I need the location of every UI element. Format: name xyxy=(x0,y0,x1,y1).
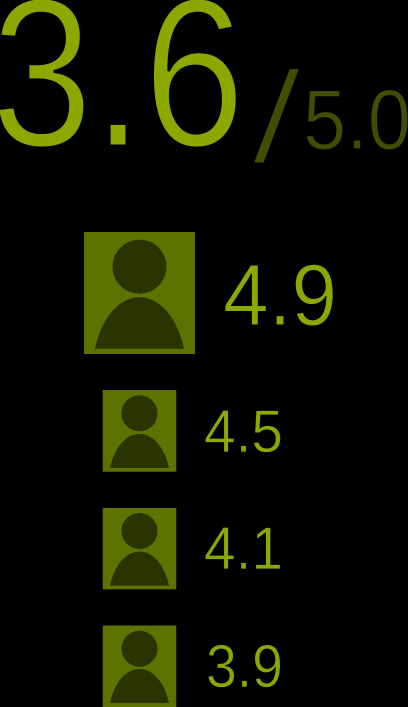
icon: person xyxy=(103,626,176,707)
icon: person large xyxy=(84,232,195,354)
row 3 xyxy=(103,508,283,589)
rating 3.9: 3.9 xyxy=(206,633,283,700)
row 2 xyxy=(103,390,283,472)
row 1: top rating xyxy=(84,232,337,354)
rating 4.5: 4.5 xyxy=(204,398,283,465)
icon: person xyxy=(103,390,176,472)
rating 4.1: 4.1 xyxy=(204,515,283,582)
overall score xyxy=(0,0,408,191)
rating 4.9: 4.9 xyxy=(223,247,337,344)
score scale maximum xyxy=(251,44,408,191)
icon: person xyxy=(103,508,176,589)
row 4 xyxy=(103,626,283,707)
slash: / xyxy=(251,44,302,191)
